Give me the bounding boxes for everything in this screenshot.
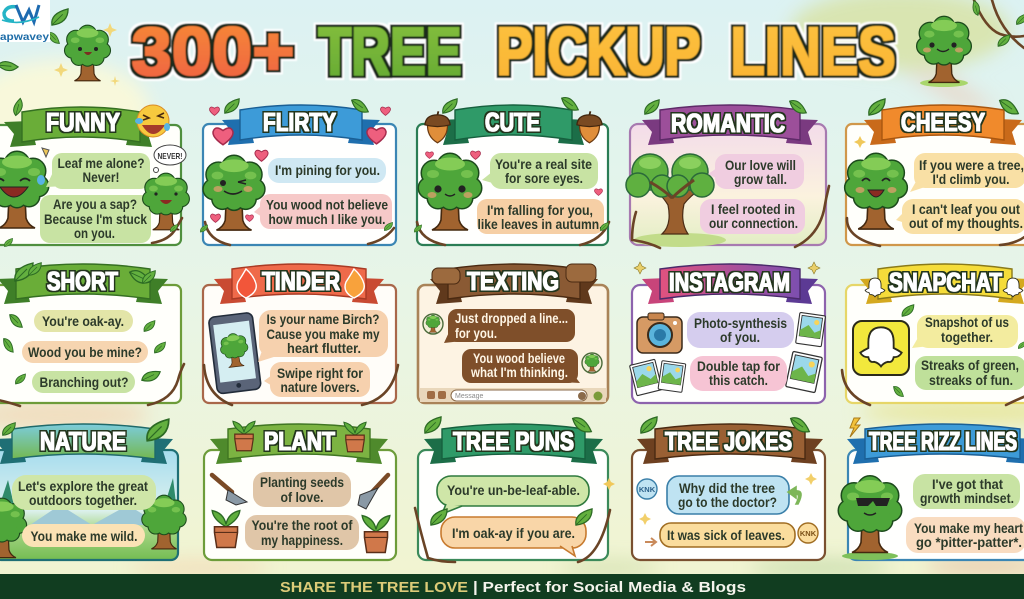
panel: plant bbox=[204, 421, 396, 560]
bubble: my happiness. bbox=[261, 533, 343, 548]
bubble: of you. bbox=[720, 330, 760, 345]
bubble: grow tall. bbox=[734, 172, 787, 187]
bubble bbox=[912, 315, 1018, 348]
bubble: Our love will bbox=[725, 158, 796, 173]
icon: knock bubble right: KNK bbox=[800, 529, 817, 538]
bubble: incoming bbox=[444, 309, 575, 343]
banner bbox=[0, 263, 168, 304]
branch decor bbox=[414, 222, 609, 245]
icon: trowel right bbox=[358, 475, 388, 509]
icon: hearts bbox=[210, 107, 390, 222]
banner bbox=[0, 419, 173, 464]
bubble: outgoing bbox=[462, 349, 580, 383]
banner: CHEESY bbox=[901, 107, 985, 137]
bubble bbox=[254, 194, 392, 229]
bubble: Snapshot of us bbox=[925, 315, 1009, 330]
bubble bbox=[268, 158, 386, 183]
panel: short bbox=[0, 263, 184, 406]
bubble: Let's explore the great bbox=[18, 479, 148, 494]
frame bbox=[632, 285, 825, 403]
decor: top left leaves bbox=[0, 9, 68, 76]
bubble bbox=[910, 153, 1024, 192]
frame bbox=[848, 450, 1024, 560]
icon: cool tree with sunglasses bbox=[839, 476, 901, 560]
title: TREE bbox=[318, 14, 462, 90]
icon: leaves and vine bbox=[415, 478, 615, 562]
banner: TEXTING bbox=[467, 266, 559, 296]
bubble bbox=[22, 524, 145, 547]
frame bbox=[418, 450, 608, 560]
title: 300+ bbox=[132, 14, 294, 90]
logo bbox=[0, 0, 50, 43]
frame bbox=[0, 285, 181, 403]
icon: laughing tree bbox=[0, 148, 49, 228]
panel: cute bbox=[414, 96, 609, 245]
bubble bbox=[437, 476, 589, 514]
bubble: Double tap for bbox=[697, 359, 781, 374]
bubble: I'm falling for you, bbox=[487, 203, 593, 218]
bubble: Are you a sap? bbox=[53, 197, 137, 212]
bubble: outgoing: what I'm thinking. bbox=[470, 365, 568, 380]
bubble bbox=[708, 154, 804, 189]
bubble: incoming: for you. bbox=[455, 326, 497, 341]
branch decor bbox=[842, 370, 1024, 405]
panel: cheesy bbox=[845, 97, 1024, 246]
bubble bbox=[913, 474, 1020, 509]
icon: polaroid photos bbox=[629, 312, 826, 396]
frame bbox=[0, 450, 178, 560]
frame bbox=[203, 285, 396, 403]
bubble: You're un-be-leaf-able. bbox=[447, 483, 580, 498]
frame bbox=[846, 124, 1024, 245]
icon: left tree bbox=[0, 499, 26, 558]
banner bbox=[634, 262, 820, 304]
panel: instagram bbox=[629, 262, 826, 403]
frame bbox=[630, 124, 826, 245]
bubble: outgoing: You wood believe bbox=[473, 351, 565, 366]
bubble bbox=[22, 341, 148, 363]
icon: trowel left bbox=[212, 475, 247, 505]
bubble: I'm pining for you. bbox=[275, 163, 380, 178]
banner bbox=[210, 421, 388, 464]
icon: knock bubble left bbox=[637, 479, 657, 499]
banner bbox=[847, 418, 1024, 464]
title: PICKUP bbox=[496, 14, 700, 90]
bubble: together. bbox=[941, 330, 993, 345]
icon: header tree right bbox=[917, 17, 971, 87]
bubble: Photo-synthesis bbox=[694, 316, 787, 331]
frame bbox=[632, 450, 825, 560]
panel: flirty bbox=[200, 98, 396, 245]
branch decor bbox=[4, 218, 182, 247]
bubble: I feel rooted in bbox=[711, 202, 795, 217]
bubble: on you. bbox=[74, 226, 115, 241]
bubble: nature lovers. bbox=[280, 380, 360, 395]
bubble bbox=[34, 310, 133, 332]
icon: pot right bbox=[362, 516, 390, 552]
icon: knock bubble left: KNK bbox=[639, 485, 656, 494]
branch decor bbox=[847, 218, 1024, 246]
title bbox=[132, 14, 896, 90]
banner bbox=[430, 264, 598, 304]
bubble bbox=[700, 199, 805, 234]
bubble: Swipe right for bbox=[277, 366, 364, 381]
bubble bbox=[687, 312, 794, 348]
branch decor bbox=[0, 364, 184, 406]
panel: romantic bbox=[626, 99, 829, 248]
frame bbox=[417, 124, 608, 245]
bubble: Cause you make my bbox=[266, 327, 380, 342]
icon: phone with tree bbox=[208, 312, 261, 394]
icon: right tree bbox=[142, 496, 186, 549]
bubble bbox=[896, 199, 1024, 234]
bubble: streaks of fun. bbox=[929, 373, 1013, 388]
title: LINES bbox=[730, 14, 896, 90]
bubble: incoming: Just dropped a line... bbox=[455, 311, 568, 326]
bubble bbox=[906, 517, 1024, 553]
banner: PLANT bbox=[264, 426, 335, 456]
bubble: of love. bbox=[280, 490, 324, 505]
bubble bbox=[690, 356, 787, 391]
frame bbox=[203, 124, 396, 245]
frame bbox=[204, 450, 396, 560]
message input bar: Message bbox=[455, 393, 484, 400]
frame bbox=[418, 285, 608, 403]
banner bbox=[860, 264, 1024, 304]
bubble bbox=[258, 310, 388, 362]
bubble: how much I like you. bbox=[268, 212, 386, 227]
bubble: Is your name Birch? bbox=[266, 312, 380, 327]
bubble bbox=[264, 362, 370, 397]
footer bar: SHARE THE TREE LOVE bbox=[280, 579, 468, 596]
bubble bbox=[245, 515, 359, 550]
icon: pot left bbox=[212, 511, 240, 547]
bubble: I'm oak-ay if you are. bbox=[452, 526, 575, 541]
icon: cute tree bbox=[419, 154, 481, 230]
bubble bbox=[46, 153, 150, 189]
branch decor bbox=[200, 222, 394, 245]
bubble: Leaf me alone? bbox=[58, 156, 144, 171]
bubble: Planting seeds bbox=[260, 475, 344, 490]
bubble bbox=[253, 472, 351, 507]
panel: nature bbox=[0, 419, 186, 560]
frame bbox=[0, 125, 181, 245]
icon: camera bbox=[637, 313, 682, 353]
panel: texting bbox=[418, 264, 608, 403]
bubble: I'd climb you. bbox=[932, 172, 1010, 187]
icon: snapchat logo bbox=[853, 321, 909, 375]
icon: scattered leaves bbox=[2, 315, 165, 385]
bubble: like leaves in autumn. bbox=[478, 217, 602, 232]
message input bar bbox=[420, 388, 606, 402]
icon: twin entwined tree bbox=[626, 154, 726, 247]
banner bbox=[437, 96, 590, 145]
banner: FUNNY bbox=[46, 107, 120, 137]
bubble: You wood not believe bbox=[266, 198, 388, 212]
bubble: our connection. bbox=[709, 216, 798, 231]
panel: snapchat bbox=[842, 264, 1024, 405]
icon: winking tree bbox=[204, 156, 264, 230]
panel: tinder bbox=[203, 264, 398, 405]
banner: NATURE bbox=[40, 426, 126, 456]
bubble: Why did the tree bbox=[679, 481, 775, 496]
banner bbox=[637, 415, 823, 464]
banner bbox=[864, 97, 1022, 145]
panel: funny bbox=[0, 98, 189, 247]
banner: FLIRTY bbox=[263, 107, 336, 137]
footer bar bbox=[0, 574, 1024, 599]
bubble bbox=[667, 476, 789, 514]
banner bbox=[222, 98, 380, 145]
icon: happy tree bbox=[845, 136, 907, 229]
landscape bbox=[0, 478, 178, 530]
icon: green arrow and sparkles bbox=[639, 473, 817, 546]
bubble: You're the root of bbox=[252, 518, 353, 533]
banner: ROMANTIC bbox=[671, 108, 785, 138]
icon: small tree with never speech bbox=[143, 145, 189, 230]
bubble bbox=[32, 371, 135, 393]
banner: TREE PUNS bbox=[453, 426, 574, 456]
icon: tree avatar left bbox=[423, 314, 443, 334]
bubble bbox=[477, 199, 604, 234]
panel: tree rizz lines bbox=[839, 418, 1024, 560]
banner: SHORT bbox=[47, 266, 118, 296]
bubble: Never! bbox=[82, 170, 120, 185]
bubble: Because I'm stuck bbox=[44, 212, 147, 227]
banner: INSTAGRAM bbox=[669, 267, 790, 297]
frame bbox=[846, 285, 1024, 403]
bubble bbox=[482, 153, 598, 189]
icon: leaves bbox=[894, 305, 1024, 396]
bubble: go *pitter-patter*. bbox=[916, 535, 1022, 550]
bubble: go to the doctor? bbox=[678, 495, 777, 510]
banner: TREE JOKES bbox=[665, 426, 792, 456]
banner: CUTE bbox=[485, 107, 540, 137]
bubble: You're a real site bbox=[495, 157, 592, 172]
bubble: It was sick of leaves. bbox=[667, 528, 785, 543]
bubble bbox=[441, 517, 586, 556]
icon: acorns bbox=[425, 111, 603, 196]
bubble bbox=[40, 195, 151, 243]
banner bbox=[4, 98, 158, 147]
bubble bbox=[915, 356, 1024, 390]
bubble: Branching out? bbox=[40, 375, 128, 390]
banner bbox=[642, 99, 818, 145]
panel: tree jokes bbox=[632, 415, 825, 560]
icon: knock bubble right bbox=[798, 523, 818, 543]
bubble: You make me wild. bbox=[30, 529, 138, 544]
bubble bbox=[12, 475, 156, 510]
panel: tree puns bbox=[415, 415, 615, 562]
banner bbox=[214, 264, 384, 304]
banner: TINDER bbox=[262, 266, 340, 296]
bubble: growth mindset. bbox=[920, 491, 1014, 506]
bubble: heart flutter. bbox=[287, 341, 361, 356]
icon: tree avatar right bbox=[582, 353, 602, 373]
icon: laughing emoji bbox=[135, 105, 170, 137]
decor: top right branch bbox=[969, 0, 1024, 48]
logo: apwavey bbox=[0, 31, 49, 43]
bubble: Wood you be mine? bbox=[28, 345, 142, 360]
branch decor bbox=[204, 365, 398, 405]
branch decor bbox=[632, 186, 829, 248]
footer bar: | Perfect for Social Media & Blogs bbox=[473, 579, 746, 596]
icon: header tree left bbox=[54, 23, 120, 86]
bubble: this catch. bbox=[709, 373, 768, 388]
bubble: for sore eyes. bbox=[505, 171, 583, 186]
icon: small tree with never speech: NEVER! bbox=[158, 151, 183, 161]
bubble bbox=[660, 523, 795, 547]
banner bbox=[424, 415, 603, 464]
bubble: You're oak-ay. bbox=[42, 314, 124, 329]
bubble: I've got that bbox=[932, 477, 1003, 492]
bubble: outdoors together. bbox=[29, 493, 137, 508]
